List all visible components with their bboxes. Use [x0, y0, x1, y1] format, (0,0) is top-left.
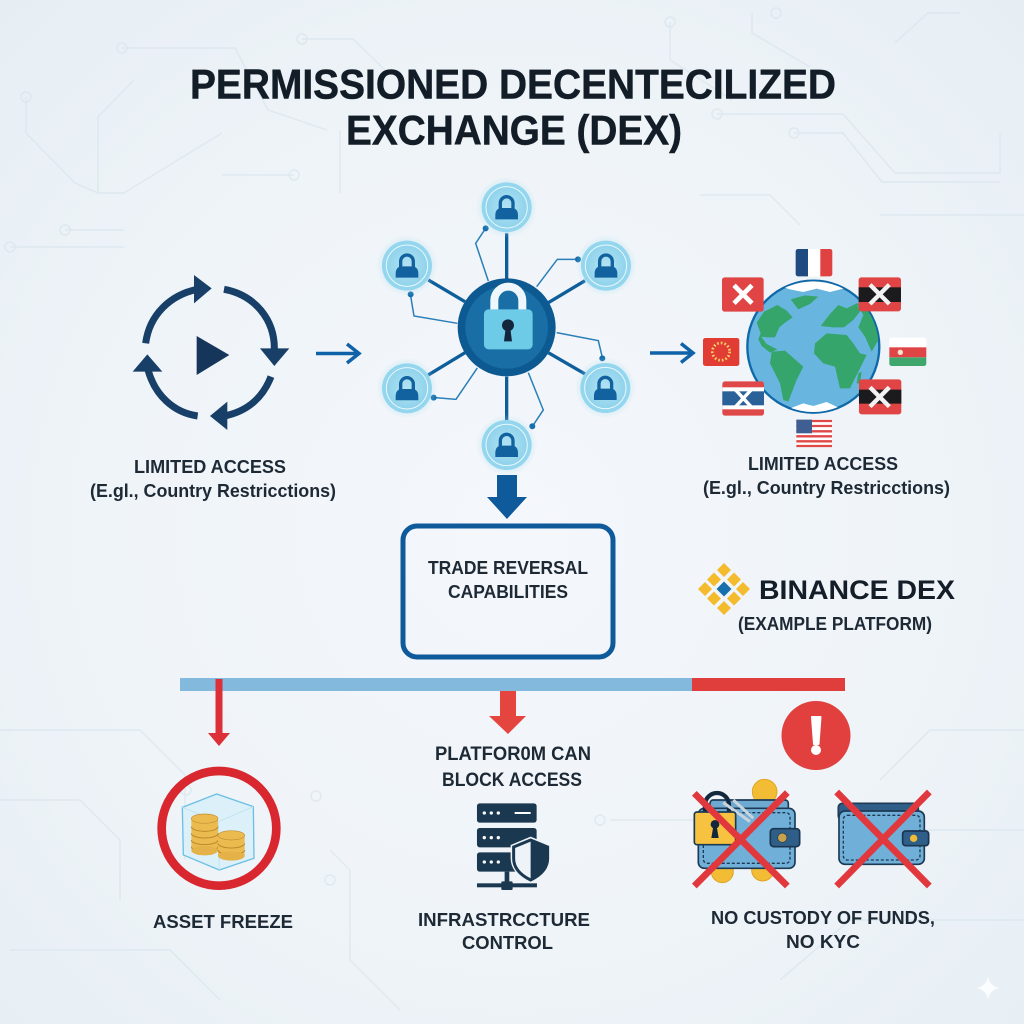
infrastructure control label: INFRASTRCCTURE — [418, 910, 590, 930]
left label: limited access — [90, 457, 336, 501]
binance dex label: BINANCE DEX — [759, 575, 955, 605]
icon: empty wallet crossed out — [837, 792, 929, 886]
infrastructure control label: CONTROL — [462, 933, 553, 953]
icon: sparkle — [977, 977, 999, 999]
no custody label: NO CUSTODY OF FUNDS, — [711, 908, 935, 928]
lock node: top — [476, 177, 537, 238]
binance dex label — [738, 575, 955, 634]
flag: black and red with cross lower — [859, 379, 901, 414]
arrow: down to trade reversal box — [487, 475, 527, 519]
flag: white red green — [889, 338, 926, 366]
left label: limited access: (E.gl., Country Restricctions) — [90, 481, 336, 501]
lock node: bottom — [476, 414, 537, 476]
asset freeze label: ASSET FREEZE — [153, 912, 293, 932]
binance dex label: (EXAMPLE PLATFORM) — [738, 614, 932, 634]
horizontal split bar — [180, 678, 845, 691]
lock node: lower left — [376, 358, 438, 419]
globe with country flags — [703, 249, 926, 447]
no custody label: NO KYC — [786, 932, 860, 952]
platform can block access label: PLATFOR0M CAN — [435, 744, 591, 765]
arrow: cycle to network — [316, 344, 359, 363]
platform can block access label: BLOCK ACCESS — [442, 770, 582, 791]
title: EXCHANGE (DEX) — [346, 106, 682, 154]
box: trade reversal capabilities — [403, 526, 613, 657]
right label: limited access: LIMITED ACCESS — [748, 454, 898, 474]
title: PERMISSIONED DECENTECILIZED — [190, 60, 836, 108]
arrow: network to globe — [650, 344, 693, 362]
network of locks — [376, 177, 637, 476]
right label: limited access — [703, 454, 950, 498]
lock node: lower right — [575, 357, 636, 419]
arrow: to platform can block — [489, 691, 526, 734]
flag: France — [796, 249, 832, 276]
flag: USA — [796, 420, 832, 447]
icon: red exclamation — [782, 701, 850, 770]
platform can block access label — [435, 744, 591, 791]
flag: blue striped with cross — [722, 381, 764, 416]
arrow: to asset freeze — [208, 679, 230, 746]
left label: limited access: LIMITED ACCESS — [134, 457, 286, 477]
icon: cycle arrows with play button — [133, 275, 289, 430]
box: trade reversal capabilities: TRADE REVERSAL — [428, 558, 588, 578]
central padlock hub — [458, 278, 556, 376]
lock node: upper right — [575, 235, 637, 296]
no custody label — [711, 908, 935, 952]
infrastructure control label — [418, 910, 590, 953]
icon: binance diamond logo — [698, 563, 750, 615]
icon: server with shield — [477, 803, 551, 890]
icon: locked wallet with coins crossed out — [694, 779, 800, 886]
flag: red with cross — [722, 277, 764, 312]
title — [190, 60, 836, 154]
icon: frozen coins in red circle — [162, 771, 276, 886]
flag: red with star circle — [703, 338, 739, 366]
flag: black and red with cross — [859, 277, 901, 311]
lock node: upper left — [376, 235, 438, 296]
globe — [747, 280, 881, 417]
box: trade reversal capabilities: CAPABILITIES — [448, 582, 568, 602]
right label: limited access: (E.gl., Country Restricctions) — [703, 478, 950, 498]
